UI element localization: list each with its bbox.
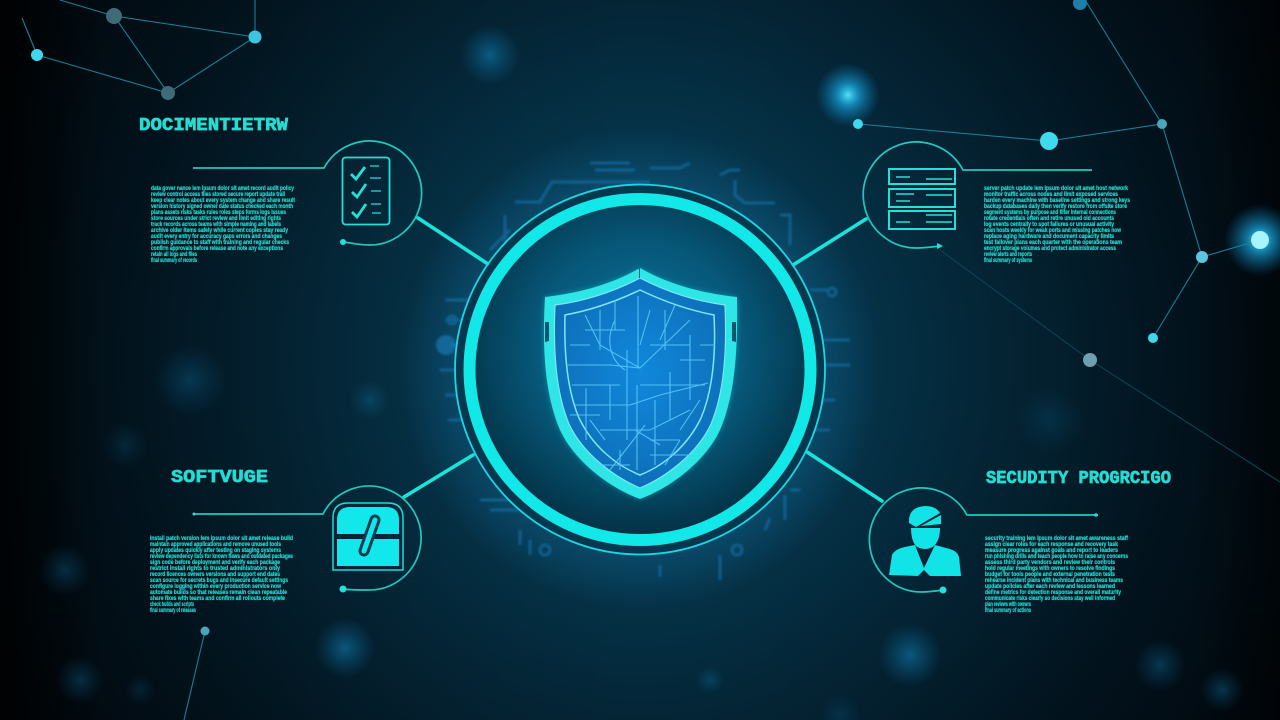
text block: documentation: archive older items safely while current copies stay ready (151, 228, 289, 234)
panel: security programme (bottom right) (869, 469, 1171, 614)
circuit halo behind central circle (400, 129, 880, 609)
text block: infrastructure (984, 186, 1131, 264)
panel: infrastructure (top right) (863, 142, 1131, 264)
text block: security programme: plan reviews with owners (985, 602, 1031, 608)
text block: documentation: audit every entry for accuracy gaps errors and changes (151, 234, 283, 240)
central ring (455, 184, 825, 554)
text block: documentation: retain all logs and files (151, 252, 197, 258)
text block: documentation: plans assets risks tasks rules roles steps forms logs issues (151, 210, 287, 216)
text block: documentation: version history signed owner date status checked each month (151, 204, 293, 210)
shield (544, 268, 737, 499)
text block: software: restrict install rights to trusted administrators only (150, 566, 281, 572)
text block: security programme: measure progress against goals and report to leaders (985, 548, 1119, 554)
text block: infrastructure: monitor traffic across nodes and limit exposed services (984, 192, 1119, 198)
text block: infrastructure: log events centrally to spot failures or unusual activity (984, 222, 1115, 228)
panel: documentation (top left) (139, 116, 422, 264)
text block: documentation: data gover nance lem ipsum dolor sit amet record audit policy (151, 186, 295, 192)
text block: infrastructure: server patch update lem ipsum dolor sit amet host network (984, 186, 1129, 192)
text block: infrastructure: review alerts and reports (984, 252, 1032, 258)
icon: checklist (342, 158, 390, 224)
text block: documentation: final summary of records (151, 258, 197, 264)
text block: infrastructure: harden every machine with baseline settings and strong keys (984, 198, 1131, 204)
text block: software: configure logging within every production service now (150, 584, 281, 590)
text block: security programme: run phishing drills and teach people how to raise any concerns (985, 554, 1129, 560)
text block: documentation: keep clear notes about every system change and share result (151, 198, 295, 204)
text block: documentation: review control access files stored secure report update trail (151, 192, 285, 198)
text block: software: check builds and scripts (150, 602, 194, 608)
text block: software: install patch version lem ipsum dolor sit amet release build (150, 536, 293, 542)
text block: security programme: budget for tools people and external penetration tests (985, 572, 1116, 578)
text block: security programme (985, 536, 1129, 614)
icon: person (889, 506, 961, 576)
heading: software: SOFTVUGE (171, 468, 268, 488)
text block: software: maintain approved applications and remove unused tools (150, 542, 282, 548)
text block: infrastructure: test failover plans each quarter with the operations team (984, 240, 1122, 246)
shield circuit lines (566, 296, 715, 470)
network: bottom left (184, 626, 210, 720)
text block: software: apply updates quickly after testing on staging systems (150, 548, 282, 554)
text block: documentation: store sources under strict review and limit editing rights (151, 216, 282, 222)
leader line and icon ring (193, 486, 421, 590)
text block: security programme: define metrics for detection response and overall maturity (985, 590, 1122, 596)
network: top left (22, 0, 262, 100)
text block: software: final summary of releases (150, 608, 196, 614)
icon: server stack (889, 169, 955, 229)
text block: documentation (151, 186, 295, 264)
network: top right (853, 0, 1280, 482)
text block: infrastructure: rotate credentials often and retire unused old accounts (984, 216, 1115, 222)
text block: software: automate builds so that releases remain clean repeatable (150, 590, 288, 596)
heading: security programme: SECUDITY PROGRCIGO (986, 469, 1171, 489)
text block: infrastructure: encrypt storage volumes and protect administrator access (984, 246, 1117, 252)
leader line and icon ring (193, 141, 422, 245)
panel: software (bottom left) (150, 468, 421, 614)
icon: software case (333, 503, 403, 570)
text block: software: share fixes with teams and confirm all rollouts complete (150, 596, 286, 602)
leader line and icon ring (869, 488, 1098, 592)
text block: infrastructure: final summary of systems (984, 258, 1032, 264)
text block: security programme: assess third party vendors and review their controls (985, 560, 1116, 566)
text block: documentation: track records across teams with simple naming and labels (151, 222, 282, 228)
text block: security programme: final summary of actions (985, 608, 1031, 614)
leader line and icon ring (863, 142, 1092, 248)
heading: documentation: DOCIMENTIETRW (139, 116, 288, 136)
text block: infrastructure: segment systems by purpose and filter internal connections (984, 210, 1117, 216)
text block: security programme: security training lem ipsum dolor sit amet awareness staff (985, 536, 1129, 542)
connector lines (404, 218, 882, 501)
text block: software: scan source for secrets bugs and insecure default settings (150, 578, 289, 584)
text block: security programme: hold regular meetings with owners to resolve findings (985, 566, 1116, 572)
text block: security programme: rehearse incident plans with technical and business teams (985, 578, 1124, 584)
text block: infrastructure: backup databases daily then verify restore from offsite store (984, 204, 1128, 210)
text block: software: review dependency lists for known flaws and outdated packages (150, 554, 294, 560)
text block: software: record licences owners versions and support end dates (150, 572, 281, 578)
text block: security programme: communicate risks clearly so decisions stay well informed (985, 596, 1115, 602)
text block: infrastructure: replace aging hardware and document capacity limits (984, 234, 1115, 240)
text block: documentation: confirm approvals before release and note any exceptions (151, 246, 284, 252)
text block: security programme: assign clear roles for each response and recovery task (985, 542, 1119, 548)
text block: security programme: update policies after each review and lessons learned (985, 584, 1115, 590)
text block: infrastructure: scan hosts weekly for weak ports and missing patches now (984, 228, 1121, 234)
text block: software: sign code before deployment and verify each package (150, 560, 281, 566)
text block: software (150, 536, 294, 614)
text block: documentation: publish guidance to staff with training and regular checks (151, 240, 290, 246)
